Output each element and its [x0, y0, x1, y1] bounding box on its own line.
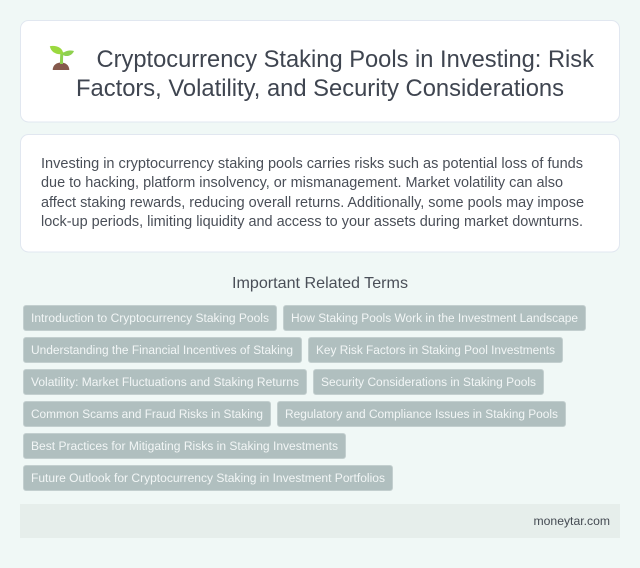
- panel: title card: [20, 20, 620, 122]
- tag: [24, 338, 302, 362]
- tag: Future Outlook for Cryptocurrency Staking in Investment Portfolios: [31, 471, 385, 485]
- tag: Key Risk Factors in Staking Pool Investments: [316, 343, 555, 357]
- text block: summary: affect staking rewards, reducing overall returns. Additionally, some pools may impose: [41, 195, 584, 211]
- tag: [24, 466, 392, 490]
- text block: summary: due to hacking, platform insolvency, or mismanagement. Market volatility can also: [41, 175, 563, 191]
- tag: [314, 370, 544, 394]
- footer credit: moneytar.com: [534, 514, 610, 528]
- text block: summary: lock-up periods, limiting liquidity and access to your assets during market downturns.: [41, 214, 583, 230]
- title: Cryptocurrency Staking Pools in Investing: Risk: [96, 46, 595, 73]
- title: [76, 46, 595, 102]
- tag: Best Practices for Mitigating Risks in Staking Investments: [31, 439, 338, 453]
- heading: related terms: Important Related Terms: [232, 275, 408, 292]
- tag: How Staking Pools Work in the Investment Landscape: [291, 311, 578, 325]
- tag: Security Considerations in Staking Pools: [321, 375, 536, 389]
- tag: Introduction to Cryptocurrency Staking Pools: [31, 311, 269, 325]
- tag: [24, 306, 276, 330]
- text block: summary: [41, 156, 584, 230]
- tag: [24, 402, 270, 426]
- tag: [24, 370, 306, 394]
- title: Factors, Volatility, and Security Considerations: [76, 75, 564, 102]
- tag: Understanding the Financial Incentives of Staking: [31, 343, 293, 357]
- text block: summary: Investing in cryptocurrency staking pools carries risks such as potential loss of funds: [41, 156, 583, 172]
- tag: Regulatory and Compliance Issues in Staking Pools: [285, 407, 558, 421]
- tag: Common Scams and Fraud Risks in Staking: [31, 407, 263, 421]
- tag: [308, 338, 562, 362]
- tag: [278, 402, 566, 426]
- tag: Volatility: Market Fluctuations and Staking Returns: [31, 375, 299, 389]
- panel: summary card: [20, 134, 620, 252]
- icon: seedling: [50, 46, 74, 70]
- tag: [24, 434, 346, 458]
- footer bar: [20, 504, 620, 538]
- tag list: related terms: [24, 306, 586, 490]
- tag: [284, 306, 586, 330]
